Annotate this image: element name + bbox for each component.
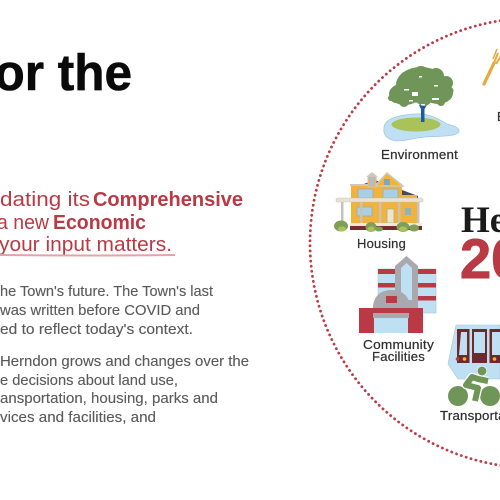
label: community facilities bbox=[363, 338, 435, 364]
paragraph one bbox=[0, 284, 213, 338]
icon: environment tree and pond bbox=[384, 66, 459, 141]
icon: community facilities bbox=[359, 256, 436, 333]
paragraph one: ed to reflect today's context. bbox=[0, 322, 193, 338]
paragraph two: Herndon grows and changes over the bbox=[0, 354, 249, 370]
label: environment: Environment bbox=[381, 148, 458, 162]
subheading bbox=[0, 189, 243, 256]
subheading: your input matters. bbox=[0, 234, 172, 256]
subheading: Comprehensive bbox=[93, 189, 243, 211]
label: community facilities: Facilities bbox=[372, 350, 425, 364]
paragraph two: e decisions about land use, bbox=[0, 373, 178, 389]
label: housing: Housing bbox=[357, 237, 406, 251]
icon: train and cyclist bbox=[448, 325, 500, 406]
paragraph one: he Town's future. The Town's last bbox=[0, 284, 213, 300]
paragraph one: was written before COVID and bbox=[0, 303, 200, 319]
subheading: dating its bbox=[0, 189, 90, 211]
dotted circle bbox=[310, 18, 500, 468]
paragraph two bbox=[0, 354, 249, 426]
paragraph two: vices and facilities, and bbox=[0, 410, 156, 426]
label: community facilities: Community bbox=[363, 338, 435, 352]
paragraph two: ansportation, housing, parks and bbox=[0, 391, 218, 407]
icon: house bbox=[334, 172, 423, 232]
subheading: Economic bbox=[53, 212, 146, 234]
icon: fork bbox=[484, 49, 500, 84]
